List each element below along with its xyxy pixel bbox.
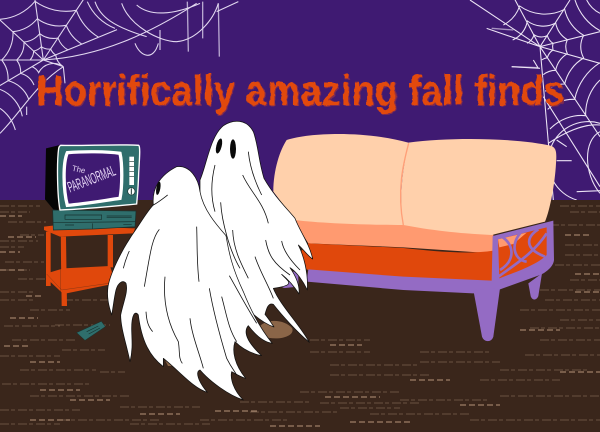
back sofa leg xyxy=(528,273,542,299)
back ghost xyxy=(200,121,313,342)
sofa seat, upper layer xyxy=(293,219,493,253)
TV back xyxy=(45,145,60,210)
right back cushion xyxy=(401,139,556,235)
title xyxy=(36,67,566,116)
front ghost xyxy=(108,167,272,400)
sofa armrest with web xyxy=(498,227,547,278)
television and VCR xyxy=(45,145,140,230)
VCR xyxy=(53,210,136,230)
floor xyxy=(0,200,600,432)
front sofa leg xyxy=(473,288,500,341)
left back cushion xyxy=(273,134,408,225)
sofa seat, orange layer xyxy=(290,243,493,282)
back ghost eyes xyxy=(215,138,236,159)
spider web: top right xyxy=(470,0,600,200)
show title on screen xyxy=(65,163,118,196)
show title on screen: PARANORMAL xyxy=(65,163,118,196)
TV body xyxy=(58,145,140,210)
front ghost folds xyxy=(123,195,257,375)
remote control xyxy=(77,321,105,340)
purple wall xyxy=(0,0,600,201)
sofa xyxy=(273,134,556,341)
back ghost folds xyxy=(212,152,300,298)
spider web: top left xyxy=(0,0,238,133)
TV controls xyxy=(128,157,135,195)
cushion seam xyxy=(401,143,409,225)
table xyxy=(44,226,135,306)
front ghost eye xyxy=(155,181,161,195)
TV screen xyxy=(64,152,122,205)
show title on screen: The xyxy=(71,164,87,176)
sofa frame xyxy=(307,221,554,293)
far sofa foot xyxy=(280,272,298,288)
